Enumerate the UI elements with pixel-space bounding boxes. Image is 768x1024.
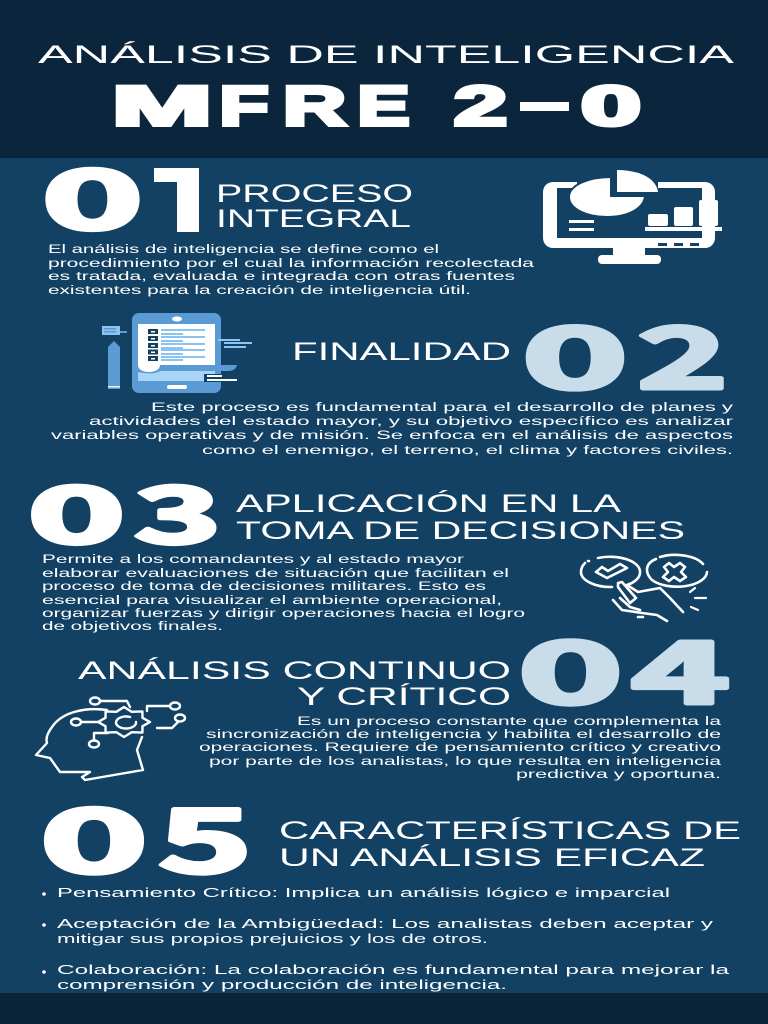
number 02	[522, 290, 728, 414]
section 3: toma de decisiones	[28, 454, 707, 633]
heading 5: UN ANÁLISIS EFICAZ	[279, 843, 705, 872]
heading 3: TOMA DE DECISIONES	[236, 517, 685, 545]
heading 5: CARACTERÍSTICAS DE	[279, 816, 741, 845]
text block 2: Este proceso es fundamental para el desarrollo de planes y	[151, 400, 735, 414]
text block 4: operaciones. Requiere de pensamiento crítico y creativo	[199, 740, 721, 754]
number 05: 0	[40, 772, 148, 898]
section 4: analisis continuo	[36, 604, 730, 781]
bullet list	[42, 885, 730, 992]
number 03: 0	[28, 454, 125, 566]
subtitle: 0	[581, 74, 641, 137]
heading 1: INTEGRAL	[216, 205, 411, 233]
bullet 3: Colaboración: La colaboración es fundamental para mejorar la	[57, 962, 730, 977]
text block 4: sincronización de inteligencia y habilita el desarrollo de	[206, 727, 721, 741]
heading 3	[236, 489, 685, 545]
text block 2: actividades del estado mayor, y su objetivo específico es analizar	[89, 414, 733, 428]
text block 1: existentes para la creación de inteligencia útil.	[48, 283, 471, 297]
subtitle: 2	[454, 74, 507, 137]
subtitle	[112, 74, 641, 137]
heading 5	[279, 816, 741, 872]
text block 3: elaborar evaluaciones de situación que facilitan el	[42, 566, 509, 580]
section 2: finalidad	[51, 290, 735, 457]
number 04: 0	[518, 604, 623, 728]
icon: tablet checklist	[102, 313, 252, 393]
number 01: 1	[153, 134, 221, 253]
text block 4: predictiva y oportuna.	[516, 767, 721, 781]
heading 4: Y CRÍTICO	[297, 682, 511, 711]
bullet 2	[42, 916, 714, 946]
text block 3: Permite a los comandantes y al estado mayor	[42, 552, 464, 566]
heading 1: PROCESO	[216, 180, 413, 208]
text block 1: procedimiento por el cual la información recolectada	[48, 256, 534, 270]
heading 4: ANÁLISIS CONTINUO	[78, 656, 511, 685]
text block 3	[42, 552, 525, 633]
bullet 2: Aceptación de la Ambigüedad: Los analistas deben aceptar y	[57, 916, 714, 931]
text block 4	[199, 714, 721, 781]
text block 2: como el enemigo, el terreno, el clima y factores civiles.	[202, 443, 733, 457]
text block 1: es tratada, evaluada e integrada con otras fuentes	[48, 269, 515, 283]
title line: ANÁLISIS DE INTELIGENCIA	[38, 40, 735, 69]
subtitle: F	[220, 74, 268, 137]
number 05	[40, 772, 252, 898]
bullet 1: Pensamiento Crítico: Implica un análisis lógico e imparcial	[57, 885, 670, 900]
text block 2	[51, 400, 735, 457]
text block 1	[48, 242, 534, 297]
bullet 1	[42, 885, 670, 900]
bullet 3: comprensión y producción de inteligencia.	[57, 977, 507, 992]
subtitle: E	[358, 74, 410, 137]
text block 3: de objetivos finales.	[42, 619, 223, 633]
section 5: caracteristicas	[40, 772, 741, 992]
number 04	[518, 604, 730, 728]
text block 4: Es un proceso constante que complementa la	[297, 714, 721, 728]
icon: hand choosing check or cross	[581, 555, 707, 621]
text block 1: El análisis de inteligencia se define como el	[48, 242, 439, 256]
bullet 2: mitigar sus propios prejuicios y los de otros.	[57, 931, 488, 946]
subtitle: R	[283, 74, 346, 137]
number 01	[42, 134, 227, 253]
section 1: proceso integral	[42, 134, 722, 297]
heading 1	[216, 180, 413, 233]
text block 4: por parte de los analistas, lo que resulta en inteligencia	[209, 754, 721, 768]
number 04: 4	[631, 604, 730, 728]
header band	[0, 0, 768, 158]
subtitle: M	[112, 74, 212, 137]
text block 2: variables operativas y de misión. Se enfoca en el análisis de aspectos	[51, 428, 733, 442]
heading 4	[78, 656, 511, 711]
footer band	[0, 993, 768, 1024]
text block 3: esencial para visualizar el ambiente operacional,	[42, 593, 502, 607]
heading 3: APLICACIÓN EN LA	[236, 489, 622, 518]
icon: monitor with charts	[543, 170, 722, 264]
number 05: 5	[158, 772, 252, 898]
bullet 3	[42, 962, 730, 992]
number 01: 0	[42, 134, 143, 253]
number 03	[28, 454, 221, 566]
heading 2: FINALIDAD	[292, 338, 511, 366]
text block 3: organizar fuerzas y dirigir operaciones hacia el logro	[42, 606, 525, 620]
text block 3: proceso de toma de decisiones militares. Esto es	[42, 579, 486, 593]
icon: head with gear	[36, 698, 185, 780]
number 02: 0	[522, 290, 628, 414]
number 02: 2	[637, 290, 728, 414]
number 03: 3	[134, 454, 221, 566]
